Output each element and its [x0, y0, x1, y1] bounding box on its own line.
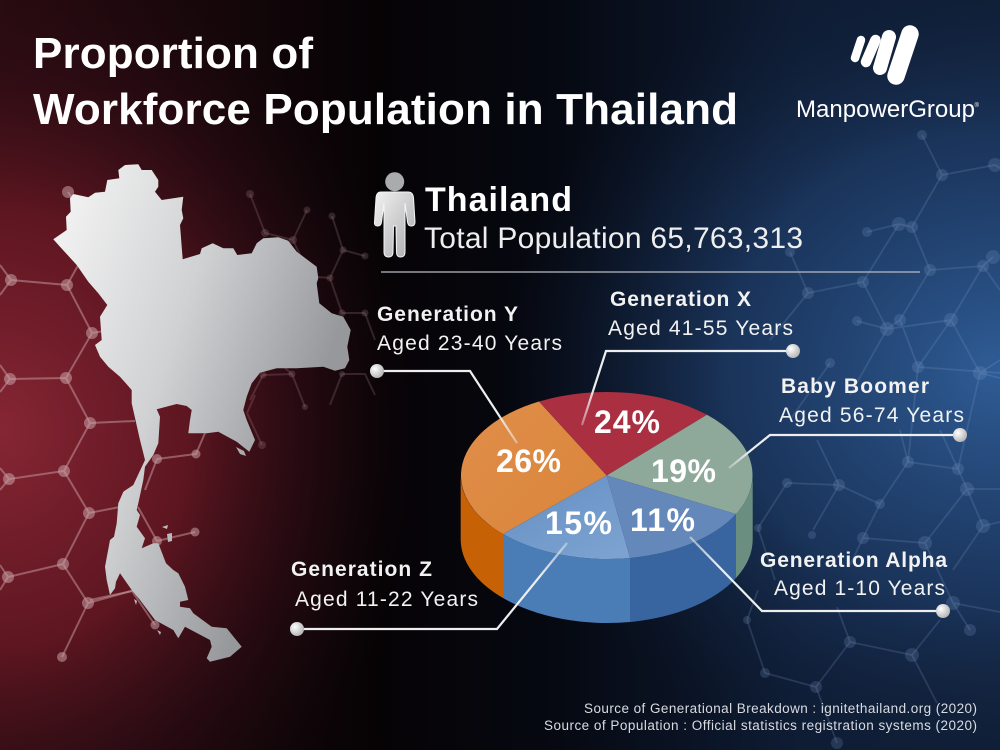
label: baby boomer: Aged 56-74 Years	[779, 404, 964, 427]
label: generation alpha	[760, 549, 947, 600]
label: generation Z: Generation Z	[291, 558, 432, 581]
map of Thailand	[53, 164, 351, 662]
label: generation Y	[377, 303, 562, 355]
pie percentages: 24%	[594, 404, 660, 440]
label: generation alpha: Aged 1-10 Years	[774, 577, 945, 600]
logo registered mark: ®	[974, 102, 980, 109]
source notes	[544, 701, 977, 733]
label: generation X: Generation X	[610, 288, 751, 311]
slice: generation Z 15%	[503, 476, 630, 559]
label: generation alpha: Generation Alpha	[760, 549, 947, 572]
label: generation Z	[291, 558, 478, 611]
pie side: generation Y	[461, 476, 503, 598]
pie percentages: 15%	[545, 505, 612, 541]
label: generation Z: Aged 11-22 Years	[295, 588, 478, 611]
panel: population summary	[374, 172, 803, 257]
title: Workforce Population in Thailand	[33, 85, 738, 134]
slice: generation alpha 11%	[607, 476, 736, 558]
text: total population: Total Population 65,763,313	[424, 222, 803, 255]
label: generation Y: Aged 23-40 Years	[377, 332, 562, 355]
pie side: generation Z	[503, 534, 630, 623]
icon: logo bars	[855, 34, 910, 76]
leader line: generation Z	[290, 543, 567, 636]
pie percentages: 19%	[651, 453, 716, 489]
icon: person	[374, 172, 415, 257]
pie side: generation alpha	[630, 514, 736, 622]
source notes: Source of Population : Official statistics registration systems (2020)	[544, 718, 977, 733]
pie chart: generations	[461, 392, 753, 623]
pie percentages: 26%	[496, 443, 561, 479]
label: baby boomer	[779, 375, 964, 427]
slice: baby boomer 19%	[607, 415, 753, 514]
heading: Thailand: Thailand	[425, 181, 572, 219]
title: Proportion of	[33, 29, 313, 78]
label: generation X	[608, 288, 793, 340]
label: generation Y: Generation Y	[377, 303, 518, 326]
source notes: Source of Generational Breakdown : ignitethailand.org (2020)	[584, 701, 977, 716]
pie percentages	[496, 404, 716, 541]
slice: generation Y 26%	[461, 402, 607, 534]
logo wordmark: ManpowerGroup	[796, 96, 975, 123]
logo: ManpowerGroup	[796, 34, 980, 123]
leader line: generation X	[582, 344, 800, 425]
pie percentages: 11%	[630, 502, 695, 538]
label: baby boomer: Baby Boomer	[781, 375, 929, 398]
leader line: generation alpha	[690, 537, 950, 618]
pie side: baby boomer	[736, 476, 753, 578]
label: generation X: Aged 41-55 Years	[608, 317, 793, 340]
slice: generation X 24%	[539, 392, 707, 476]
title	[33, 29, 738, 134]
leader line: baby boomer	[729, 428, 967, 468]
leader line: generation Y	[370, 364, 517, 443]
